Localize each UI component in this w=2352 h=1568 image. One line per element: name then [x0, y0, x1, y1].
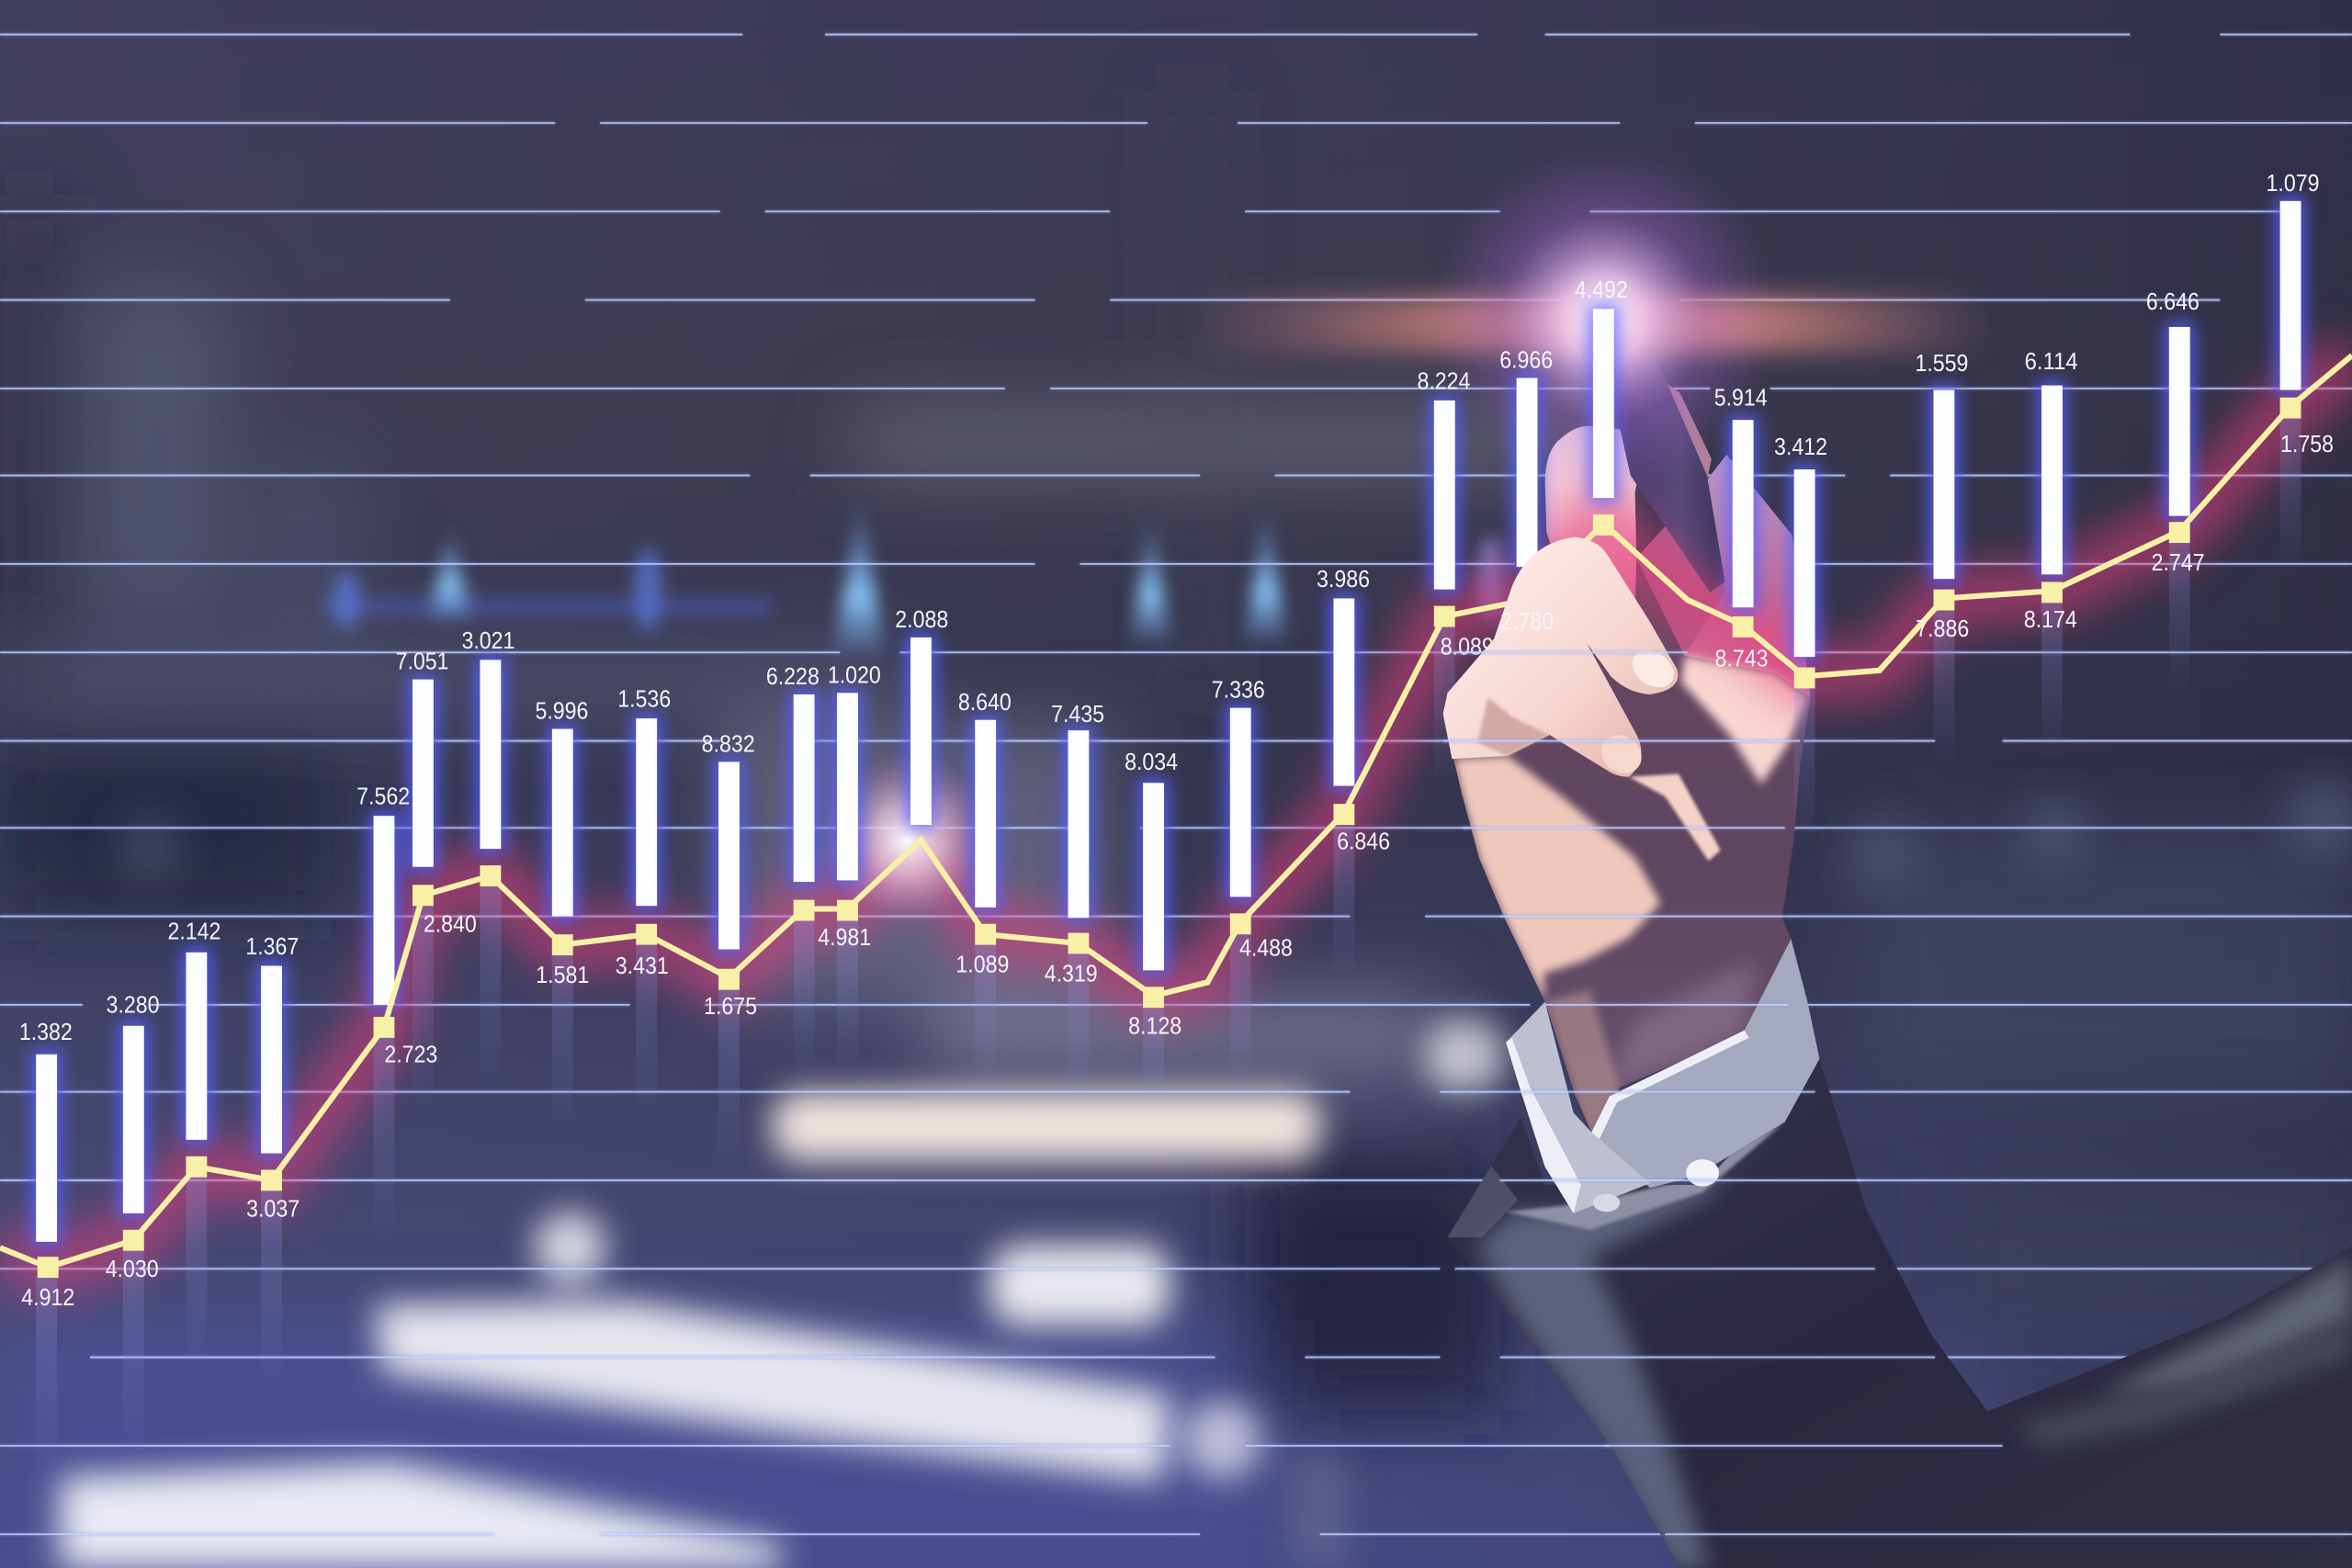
orange highlight strip: [1185, 296, 1995, 353]
lower value labels: 6.846: [1337, 828, 1390, 855]
jacket sleeve: [1440, 1050, 2352, 1568]
lower value labels: 2.723: [384, 1040, 437, 1067]
upper value labels: 3.986: [1317, 565, 1370, 592]
lower value labels: 4.912: [21, 1283, 74, 1311]
upper value labels: 3.412: [1774, 433, 1827, 460]
thumb: [1545, 426, 1645, 615]
lower value labels: 8.128: [1128, 1011, 1182, 1039]
upper value labels: 1.382: [19, 1018, 73, 1045]
lower value labels: 2.747: [2152, 548, 2205, 576]
lower value labels: 2.840: [424, 909, 477, 937]
bar glow: [31, 197, 2305, 1247]
upper value labels: 2.088: [895, 605, 948, 633]
lower value labels: 4.488: [1239, 934, 1293, 962]
lower value labels: 4.319: [1045, 959, 1098, 987]
lower value labels: 7.886: [1916, 615, 1969, 642]
yellow line chart with markers: [0, 355, 2352, 1278]
lower value labels: 3.037: [246, 1195, 300, 1223]
upper value labels: 6.966: [1499, 346, 1553, 374]
upper value labels: 3.280: [107, 991, 159, 1019]
upper value labels: 5.914: [1714, 383, 1768, 411]
lower value labels: 4.981: [818, 923, 871, 951]
upper value labels: 1.367: [245, 932, 299, 960]
white candlestick bars: [36, 201, 2301, 1242]
lower value labels: 1.758: [2280, 430, 2334, 457]
upper value labels: 6.646: [2146, 288, 2199, 315]
lower value labels: 8.174: [2024, 605, 2077, 633]
glow at pen tip: [1431, 145, 1776, 491]
shirt cuff: [1506, 939, 1819, 1213]
lower value labels: 3.431: [616, 952, 669, 979]
upper value labels: 2.142: [167, 918, 220, 945]
bar reflections: [36, 414, 2301, 1484]
upper value labels: 8.034: [1125, 748, 1178, 775]
lower value labels: [21, 430, 2334, 1311]
finger behind the pen: [1659, 378, 1712, 479]
upper value labels: 7.435: [1051, 700, 1104, 728]
grid lines crossing the hand: [1443, 652, 2352, 1534]
label partly over finger: 2.780: [1500, 607, 1554, 635]
upper value labels: 3.021: [461, 626, 514, 654]
upper value labels: 1.559: [1915, 349, 1968, 377]
upper value labels: 7.336: [1212, 676, 1265, 704]
lower value labels: 1.089: [956, 950, 1009, 977]
upper value labels: 6.228: [766, 662, 820, 690]
upper value labels: 8.640: [958, 688, 1012, 716]
upper value labels: 8.224: [1417, 367, 1470, 394]
glow at centre of chart: [820, 753, 994, 927]
lower value labels: 8.743: [1715, 644, 1768, 671]
pen: [1614, 329, 1725, 592]
upper value labels: 4.492: [1575, 276, 1628, 303]
lower value labels: 4.030: [106, 1255, 159, 1282]
upper value labels: 8.832: [702, 729, 755, 757]
upper value labels: 1.536: [617, 684, 671, 712]
upper value labels: [19, 169, 2319, 1045]
upper value labels: 5.996: [535, 697, 588, 725]
upper value labels: 1.079: [2267, 169, 2319, 197]
upper value labels: 1.020: [828, 660, 881, 688]
upper value labels: 6.114: [2025, 347, 2078, 375]
lower value labels: 1.675: [704, 992, 757, 1020]
lower value labels: 8.089: [1441, 632, 1494, 660]
lower value labels: 1.581: [536, 961, 589, 988]
upper value labels: 7.051: [396, 648, 449, 675]
upper value labels: 7.562: [356, 783, 410, 810]
foreground fingers over the chart: [1443, 537, 1681, 781]
back of hand and palm: [1453, 455, 1810, 1132]
red glow under line: [0, 355, 2352, 1268]
